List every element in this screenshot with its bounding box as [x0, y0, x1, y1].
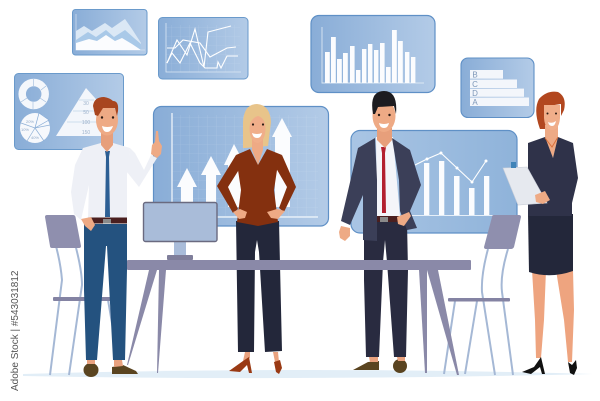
- monitor: [144, 202, 217, 260]
- heels and ankles: [229, 352, 282, 374]
- panel: area chart: [72, 10, 147, 55]
- pie chart: 40%: [31, 135, 39, 140]
- floor strip: [23, 370, 593, 378]
- head: [544, 105, 560, 130]
- trousers: [84, 224, 127, 360]
- shirt: [71, 143, 130, 220]
- shoes: [353, 359, 407, 373]
- person: woman in brown blazer: [217, 104, 296, 374]
- trousers: [236, 221, 282, 352]
- shoes: [84, 363, 138, 377]
- shirt: [376, 137, 400, 216]
- necklace: [545, 137, 558, 147]
- head: [250, 115, 266, 143]
- stock id caption: Adobe Stock | #543031812: [10, 270, 21, 391]
- belt: [377, 216, 403, 222]
- right chair: [444, 215, 521, 375]
- panel: bar chart: [311, 16, 435, 92]
- growth arrows: [177, 118, 292, 207]
- legs: [532, 270, 574, 362]
- hair: [93, 97, 118, 116]
- belt: [88, 218, 127, 224]
- tie: [105, 151, 110, 217]
- pointing hand: [151, 131, 162, 158]
- panel: line chart: [158, 18, 248, 79]
- panel: stepped A B C D chart: [461, 58, 534, 118]
- hand at side: [339, 226, 350, 241]
- left chair: [45, 215, 114, 375]
- hand on pocket: [397, 212, 411, 226]
- pyramid chart: 150: [82, 130, 90, 136]
- panel: stepped A B C D chart: A: [472, 98, 478, 107]
- pyramid chart: 50: [83, 110, 89, 116]
- hand in pocket: [81, 217, 95, 231]
- hand on clipboard: [535, 191, 550, 204]
- table: [127, 260, 471, 375]
- pie chart: 10%: [21, 127, 29, 132]
- trousers: [364, 222, 408, 357]
- neck: [545, 125, 558, 158]
- panel: center arrows chart: [154, 106, 328, 226]
- neck: [101, 130, 113, 152]
- skirt: [528, 214, 573, 275]
- black heels: [522, 357, 577, 375]
- person: woman with clipboard: [503, 92, 578, 375]
- pie chart: [20, 113, 50, 143]
- neck: [252, 136, 263, 165]
- pyramid chart: [56, 88, 104, 136]
- jacket: [528, 137, 578, 216]
- hair: [536, 92, 565, 129]
- clipboard: [503, 162, 547, 205]
- person: man in white shirt: [71, 97, 162, 377]
- panel: stepped A B C D chart: B: [472, 70, 478, 80]
- panel: stepped A B C D chart: C: [472, 80, 478, 89]
- panel: stepped A B C D chart: D: [472, 89, 478, 98]
- donut chart: [21, 79, 46, 109]
- head: [372, 100, 396, 132]
- panel: pie and pyramid charts: [14, 74, 124, 150]
- hands on hips: [233, 209, 247, 219]
- hair: [372, 91, 396, 114]
- person: man in dark suit: [339, 91, 421, 373]
- blazer: [236, 149, 282, 226]
- pie chart: 20%: [26, 119, 34, 124]
- jacket: [341, 138, 377, 241]
- hair: [243, 104, 271, 148]
- pyramid chart: 100: [82, 120, 90, 126]
- panel: right bars and line chart: [351, 130, 517, 233]
- pyramid chart: 30: [83, 101, 89, 107]
- head: [96, 104, 118, 136]
- neck: [377, 128, 392, 148]
- red tie: [381, 147, 386, 213]
